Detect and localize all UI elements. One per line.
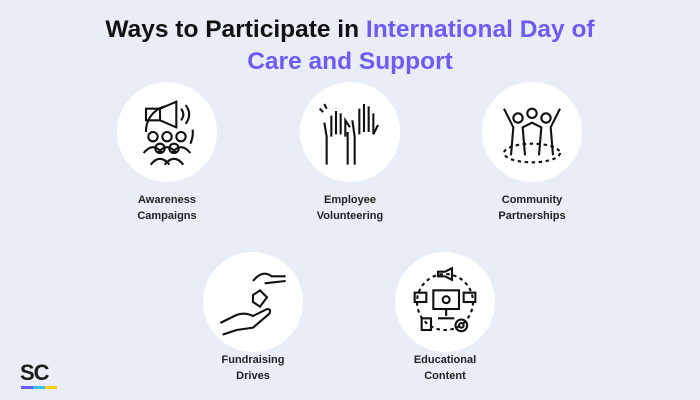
- label: fundraising drives: Fundraising: [222, 354, 284, 366]
- label: community partnerships: Community: [502, 194, 562, 206]
- icon: employee volunteering: [300, 82, 400, 182]
- title: Care and Support: [247, 48, 453, 75]
- label: awareness campaigns: [137, 194, 197, 222]
- icon: community partnerships: [482, 82, 582, 182]
- icon: fundraising drives: [203, 252, 303, 352]
- label: employee volunteering: [316, 194, 383, 222]
- label: awareness campaigns: Campaigns: [137, 210, 197, 222]
- title: [105, 16, 595, 75]
- label: educational content: Content: [424, 370, 466, 382]
- label: employee volunteering: Employee: [324, 194, 376, 206]
- label: awareness campaigns: Awareness: [138, 194, 196, 206]
- label: community partnerships: Partnerships: [498, 210, 566, 222]
- label: community partnerships: [498, 194, 566, 222]
- title: Ways to Participate in International Day of: [105, 16, 595, 43]
- label: fundraising drives: Drives: [236, 370, 270, 382]
- label: employee volunteering: Volunteering: [317, 210, 383, 222]
- label: fundraising drives: [222, 354, 284, 382]
- label: educational content: Educational: [414, 354, 476, 366]
- icon: educational content: [395, 252, 495, 352]
- label: educational content: [414, 354, 476, 382]
- logo: [20, 360, 57, 389]
- icon: awareness campaigns: [117, 82, 217, 182]
- logo: SC: [20, 360, 49, 385]
